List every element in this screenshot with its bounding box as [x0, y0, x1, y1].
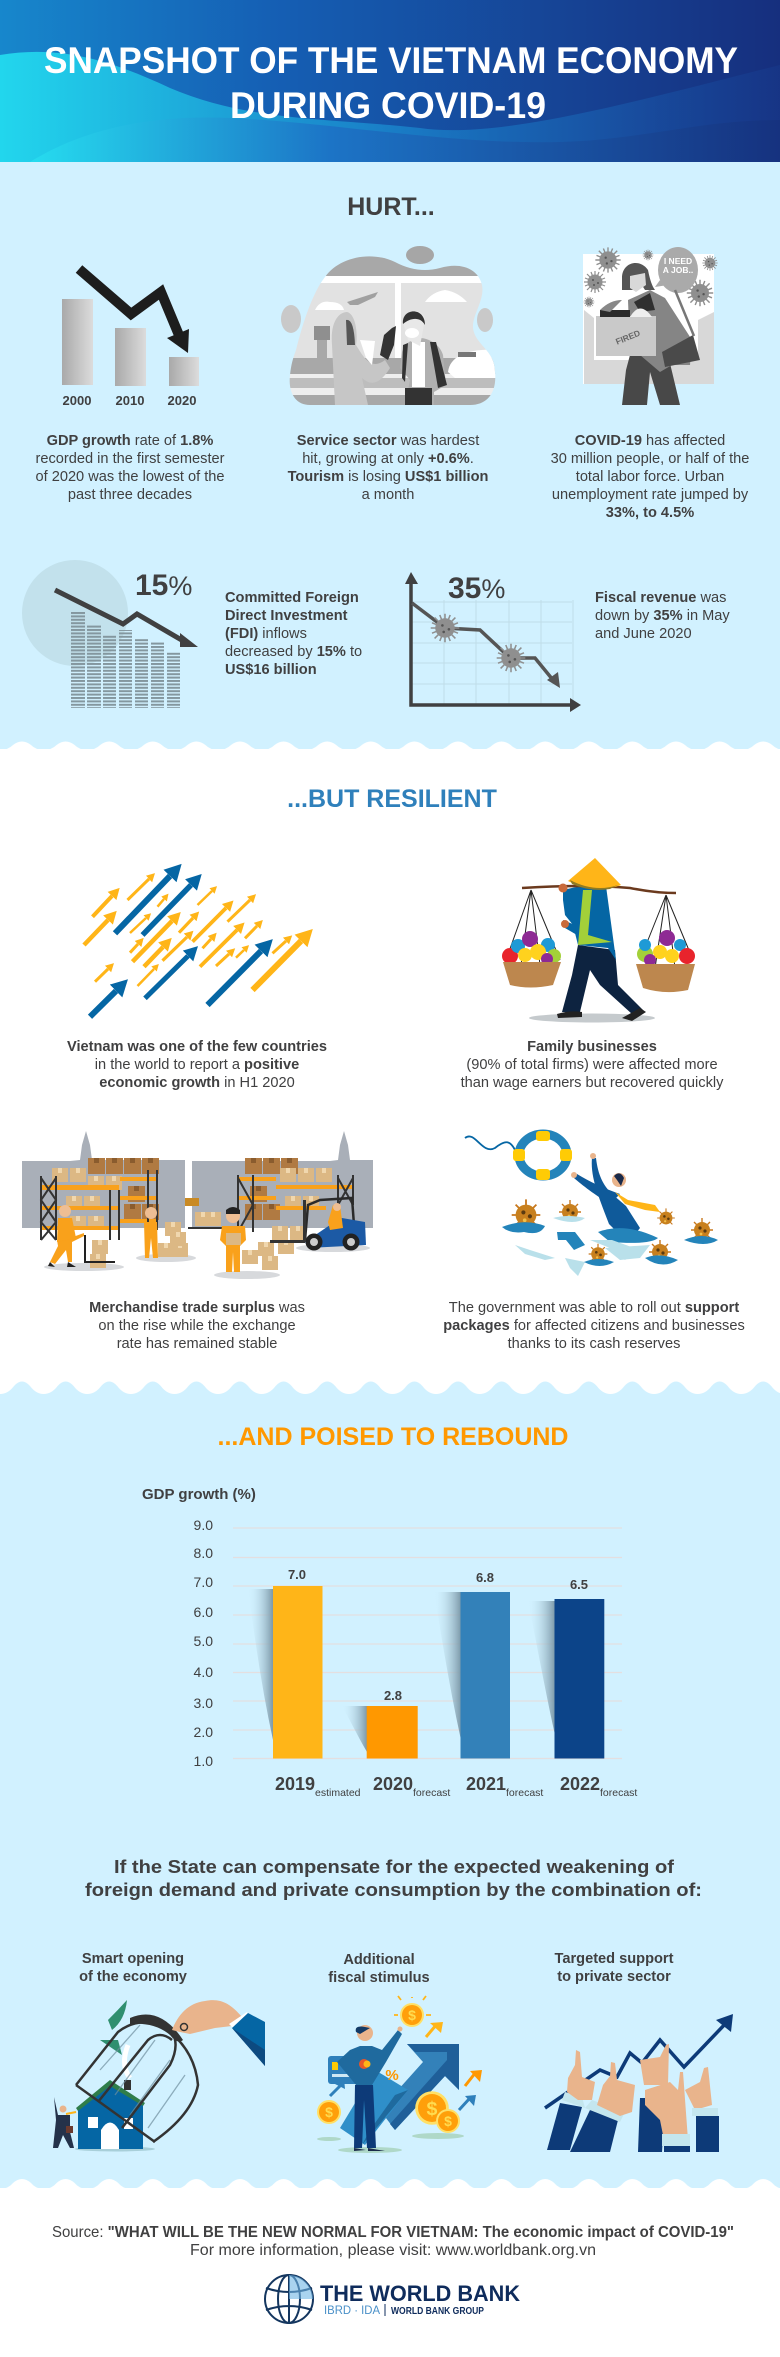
chart: fiscal revenue decline: 35%	[448, 572, 505, 605]
text: fdi: Committed Foreign	[225, 590, 359, 606]
chart: gdp growth: 1.0	[194, 1753, 213, 1769]
header banner	[0, 0, 780, 162]
chart: fdi decline	[22, 560, 198, 708]
text: trade surplus: rate has remained stable	[117, 1336, 277, 1352]
icon: falling bar chart: 2020	[168, 393, 196, 408]
logo: the world bank: THE WORLD BANK	[320, 2281, 520, 2306]
text: support packages: The government was able to roll out support	[449, 1300, 739, 1316]
text: family businesses: Family businesses	[527, 1039, 657, 1055]
label: fiscal stimulus: Additional	[343, 1952, 415, 1968]
label: smart opening: Smart opening	[82, 1951, 184, 1967]
label: smart opening: of the economy	[79, 1969, 188, 1985]
heading: poised to rebound: ...AND POISED TO REBOUND	[218, 1423, 568, 1451]
icon: rising arrows	[84, 876, 301, 1017]
text: gdp growth: past three decades	[68, 487, 192, 503]
chart: gdp growth: 2020	[373, 1774, 413, 1794]
icon: falling bar chart: 2010	[116, 393, 144, 408]
text: fdi: Direct Investment	[225, 608, 348, 624]
text: positive growth: Vietnam was one of the few countries	[67, 1039, 327, 1055]
icon: falling bar chart	[62, 269, 199, 408]
icon: fired worker: I NEED	[664, 256, 692, 266]
chart: gdp growth: 6.0	[194, 1604, 213, 1620]
chart: gdp growth: 2.0	[194, 1724, 213, 1740]
text: fdi: (FDI) inflows	[225, 626, 307, 642]
chart: gdp growth: 2021	[466, 1774, 506, 1794]
text: service sector: Service sector was hardest	[297, 433, 479, 449]
icon: fiscal stimulus with businessman: %	[385, 2067, 399, 2084]
chart: gdp growth: estimated	[315, 1787, 361, 1799]
logo: the world bank: IBRD · IDA	[324, 2303, 380, 2317]
text: family businesses: (90% of total firms) were affected more	[466, 1057, 718, 1073]
text: fdi: US$16 billion	[225, 662, 317, 678]
title	[44, 40, 738, 126]
text: covid-19 labor: 33%, to 4.5%	[606, 505, 694, 521]
panel: poised to rebound	[53, 1423, 733, 2153]
text: fiscal revenue: and June 2020	[595, 626, 692, 642]
text: fdi: decreased by 15% to	[225, 644, 362, 660]
icon: street vendor	[502, 858, 695, 1022]
icon: fired worker: FIRED	[614, 328, 642, 347]
chart: gdp growth	[142, 1486, 637, 1799]
icon: airport temperature check	[281, 246, 500, 406]
chart: gdp growth: 8.0	[194, 1545, 213, 1561]
text: gdp growth: recorded in the first semester	[36, 451, 225, 467]
text: support packages: thanks to its cash reserves	[508, 1336, 680, 1352]
text: positive growth: in the world to report a positive	[95, 1057, 299, 1073]
icon: hand lifting cage off house	[53, 2000, 265, 2152]
text: trade surplus: on the rise while the exchange	[98, 1318, 296, 1334]
text: service sector: a month	[362, 487, 414, 503]
icon: fiscal stimulus with businessman	[317, 1996, 482, 2153]
text: gdp growth: GDP growth rate of 1.8%	[47, 433, 213, 449]
icon: fired worker	[583, 247, 718, 405]
chart: gdp growth: 2.8	[384, 1688, 402, 1703]
icon: thumbs up and rising line	[545, 2014, 733, 2152]
heading: but resilient: ...BUT RESILIENT	[287, 785, 497, 813]
icon: falling bar chart: 2000	[63, 393, 91, 408]
heading: hurt: HURT...	[347, 193, 435, 221]
text: service sector: Tourism is losing US$1 billion	[288, 469, 488, 485]
chart: gdp growth: 4.0	[194, 1664, 213, 1680]
text: fiscal revenue: down by 35% in May	[595, 608, 730, 624]
text: service sector: hit, growing at only +0.6%.	[302, 451, 474, 467]
title: DURING COVID-19	[230, 85, 546, 126]
chart: gdp growth: 2022	[560, 1774, 600, 1794]
text: state compensation	[85, 1857, 702, 1900]
panel: hurt	[22, 193, 749, 712]
chart: fiscal revenue decline	[405, 572, 581, 712]
text: fiscal revenue: Fiscal revenue was	[595, 590, 726, 606]
chart: gdp growth: 6.5	[570, 1577, 588, 1592]
chart: gdp growth: 9.0	[194, 1517, 213, 1533]
text: more information: For more information, please visit: www.worldbank.org.vn	[190, 2242, 596, 2259]
chart: gdp growth: forecast	[413, 1787, 450, 1799]
text: source: Source: "WHAT WILL BE THE NEW NORMAL FOR VIETNAM: The economic impact of COVID-19"	[52, 2224, 734, 2241]
text: covid-19 labor: COVID-19 has affected	[575, 433, 725, 449]
text: family businesses: than wage earners but recovered quickly	[461, 1075, 724, 1091]
chart: gdp growth: forecast	[506, 1787, 543, 1799]
chart: gdp growth: 6.8	[476, 1570, 494, 1585]
text: gdp growth: of 2020 was the lowest of the	[35, 469, 225, 485]
chart: gdp growth: 3.0	[194, 1695, 213, 1711]
logo: the world bank	[265, 2275, 520, 2323]
label: targeted support: Targeted support	[555, 1951, 674, 1967]
text: covid-19 labor: 30 million people, or half of the	[551, 451, 749, 467]
chart: gdp growth: 7.0	[194, 1574, 213, 1590]
chart: gdp growth: forecast	[600, 1787, 637, 1799]
text: support packages: packages for affected citizens and businesses	[443, 1318, 745, 1334]
label: targeted support: to private sector	[557, 1969, 671, 1985]
label: fiscal stimulus: fiscal stimulus	[328, 1970, 430, 1986]
panel: resilient	[0, 741, 780, 1394]
icon: fired worker: A JOB..	[663, 265, 693, 275]
chart: gdp growth: 5.0	[194, 1633, 213, 1649]
chart title: GDP growth (%)	[142, 1486, 256, 1503]
title: SNAPSHOT OF THE VIETNAM ECONOMY	[44, 40, 738, 81]
text: state compensation: If the State can compensate for the expected weakening of	[114, 1857, 675, 1877]
text: trade surplus: Merchandise trade surplus was	[89, 1300, 305, 1316]
logo: the world bank: WORLD BANK GROUP	[391, 2305, 484, 2317]
text: state compensation: foreign demand and private consumption by the combination of:	[85, 1880, 702, 1900]
text: covid-19 labor: total labor force. Urban	[576, 469, 724, 485]
chart: gdp growth: 7.0	[288, 1567, 306, 1582]
icon: warehouse	[22, 1131, 373, 1279]
chart: fdi decline: 15%	[135, 569, 192, 602]
text: positive growth: economic growth in H1 2020	[99, 1075, 295, 1091]
chart: gdp growth: 2019	[275, 1774, 315, 1794]
text: covid-19 labor: unemployment rate jumped by	[552, 487, 749, 503]
icon: life ring and drowning businessman	[465, 1131, 718, 1276]
panel: footer	[0, 2178, 780, 2357]
